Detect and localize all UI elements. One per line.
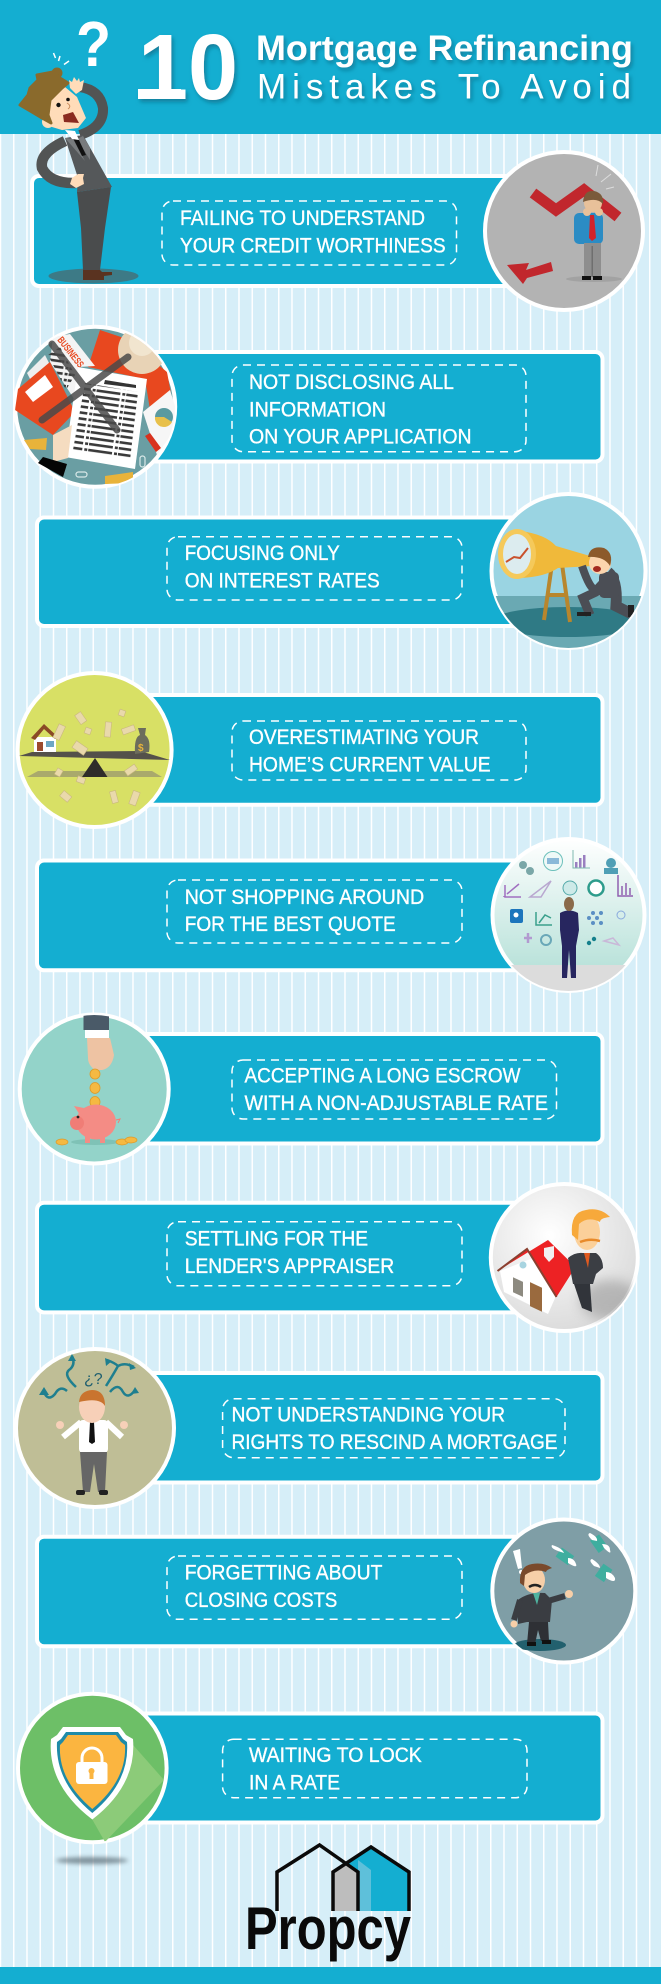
icon: falling chart and worried man	[485, 152, 643, 310]
card background	[37, 518, 537, 626]
dashed frame	[167, 880, 462, 943]
text: mistake 1: YOUR CREDIT WORTHINESS	[180, 234, 446, 258]
icon: confused man under arrows: ¿?	[84, 1371, 103, 1388]
dashed frame	[232, 365, 526, 452]
panel: mistake 1 card	[32, 152, 643, 310]
icon: scales with house and money	[18, 673, 172, 827]
lapels and tie	[65, 136, 90, 161]
face	[43, 87, 86, 130]
card background	[130, 1034, 602, 1144]
card background	[37, 860, 537, 970]
hair	[20, 69, 68, 123]
text: mistake 10	[249, 1744, 422, 1794]
text: mistake 6: WITH A NON-ADJUSTABLE RATE	[244, 1092, 548, 1115]
card background	[130, 1373, 602, 1482]
text: mistake 8: NOT UNDERSTANDING YOUR	[232, 1404, 505, 1427]
icon: man watching money fly away	[492, 1520, 635, 1662]
text: mistake 1	[180, 207, 446, 258]
hip hand	[70, 174, 84, 188]
dashed frame	[167, 1222, 462, 1286]
text: mistake 4: OVERESTIMATING YOUR	[249, 726, 479, 749]
text: mistake 9: CLOSING COSTS	[185, 1589, 337, 1612]
card background	[130, 695, 602, 805]
text: mistake 9: FORGETTING ABOUT	[185, 1562, 383, 1585]
card background	[130, 352, 602, 462]
dashed frame	[232, 721, 526, 780]
text: mistake 3	[185, 542, 380, 592]
text: mistake 6	[244, 1065, 548, 1115]
collar	[65, 130, 79, 140]
text: mistake 7: LENDER'S APPRAISER	[185, 1255, 394, 1278]
icon: documents crossed out	[15, 326, 180, 487]
text: mistake 5: NOT SHOPPING AROUND	[185, 886, 424, 909]
text: mistake 2: INFORMATION	[249, 398, 386, 421]
text: mistake 6: ACCEPTING A LONG ESCROW	[244, 1065, 521, 1088]
card background	[32, 176, 532, 286]
panel: mistake 3 card	[37, 494, 655, 656]
panel: mistake 10 card	[18, 1694, 602, 1842]
panel: mistake 4 card	[18, 673, 603, 827]
ground shadow under shield	[56, 1857, 128, 1864]
text: mistake 10: WAITING TO LOCK	[249, 1744, 422, 1767]
dashed frame	[223, 1399, 565, 1458]
icon: scales with house and money: $	[138, 743, 144, 754]
text: mistake 7: SETTLING FOR THE	[185, 1228, 368, 1251]
dashed frame	[167, 1556, 462, 1619]
card background	[37, 1203, 537, 1312]
logo: house outlines	[277, 1845, 409, 1911]
text: mistake 8	[232, 1404, 558, 1454]
title line one: Mortgage Refinancing	[256, 29, 633, 68]
title	[138, 15, 633, 119]
icon: confused man under arrows	[16, 1349, 174, 1507]
dashed frame	[167, 537, 462, 600]
question mark icon: ?	[76, 8, 111, 80]
dashed frame	[232, 1060, 556, 1119]
panel: mistake 8 card	[16, 1349, 602, 1507]
floor shadow	[48, 268, 138, 284]
text: mistake 10: IN A RATE	[249, 1771, 340, 1794]
text: mistake 2: NOT DISCLOSING ALL	[249, 371, 454, 394]
raised arm	[80, 87, 103, 135]
panel: mistake 9 card	[37, 1520, 635, 1662]
icon: man leaning on house	[491, 1184, 640, 1331]
icon: shield with padlock	[18, 1694, 167, 1842]
text: mistake 8: RIGHTS TO RESCIND A MORTGAGE	[232, 1431, 558, 1454]
logo: Propcy	[245, 1845, 412, 1962]
panel: mistake 5 card	[37, 839, 655, 995]
dashed frame	[223, 1739, 527, 1798]
card background	[120, 1714, 602, 1822]
shoes	[83, 270, 112, 280]
open mouth	[63, 112, 79, 123]
header band	[0, 0, 661, 134]
icon: man facing business charts	[485, 839, 655, 995]
arm on hip	[42, 141, 76, 183]
text: mistake 3: ON INTEREST RATES	[185, 569, 380, 592]
text: mistake 1: FAILING TO UNDERSTAND	[180, 207, 425, 230]
title line two: Mistakes To Avoid	[257, 68, 631, 106]
panel: mistake 2 card	[15, 326, 602, 487]
raised hand	[69, 77, 84, 94]
text: mistake 5: FOR THE BEST QUOTE	[185, 913, 396, 936]
text: mistake 2: ON YOUR APPLICATION	[249, 426, 472, 449]
text: mistake 4	[249, 726, 491, 776]
logo: filled house	[333, 1847, 409, 1911]
jacket	[65, 135, 112, 192]
eyes and nose	[56, 98, 70, 107]
text: mistake 9	[185, 1562, 383, 1612]
panel: mistake 7 card	[37, 1184, 640, 1331]
trousers	[77, 187, 111, 270]
panel: mistake 6 card	[20, 1014, 602, 1164]
text: mistake 4: HOME’S CURRENT VALUE	[249, 753, 491, 776]
title number 10: 10	[138, 15, 238, 119]
text: mistake 5	[185, 886, 424, 936]
dashed frame	[162, 201, 456, 265]
icon: man with telescope	[485, 494, 655, 656]
text: mistake 2	[249, 371, 472, 449]
character: worried businessman	[20, 53, 138, 284]
text: mistake 7	[185, 1228, 394, 1278]
footer band	[0, 1967, 661, 1984]
card background	[37, 1537, 537, 1646]
BUSINESS label: BUSINESS	[55, 335, 86, 370]
surprise ticks	[54, 53, 69, 64]
ear	[42, 116, 54, 128]
logo: wordmark: Propcy	[245, 1895, 412, 1962]
text: mistake 3: FOCUSING ONLY	[185, 542, 340, 565]
icon: hand dropping coins into piggy bank	[20, 1014, 169, 1164]
